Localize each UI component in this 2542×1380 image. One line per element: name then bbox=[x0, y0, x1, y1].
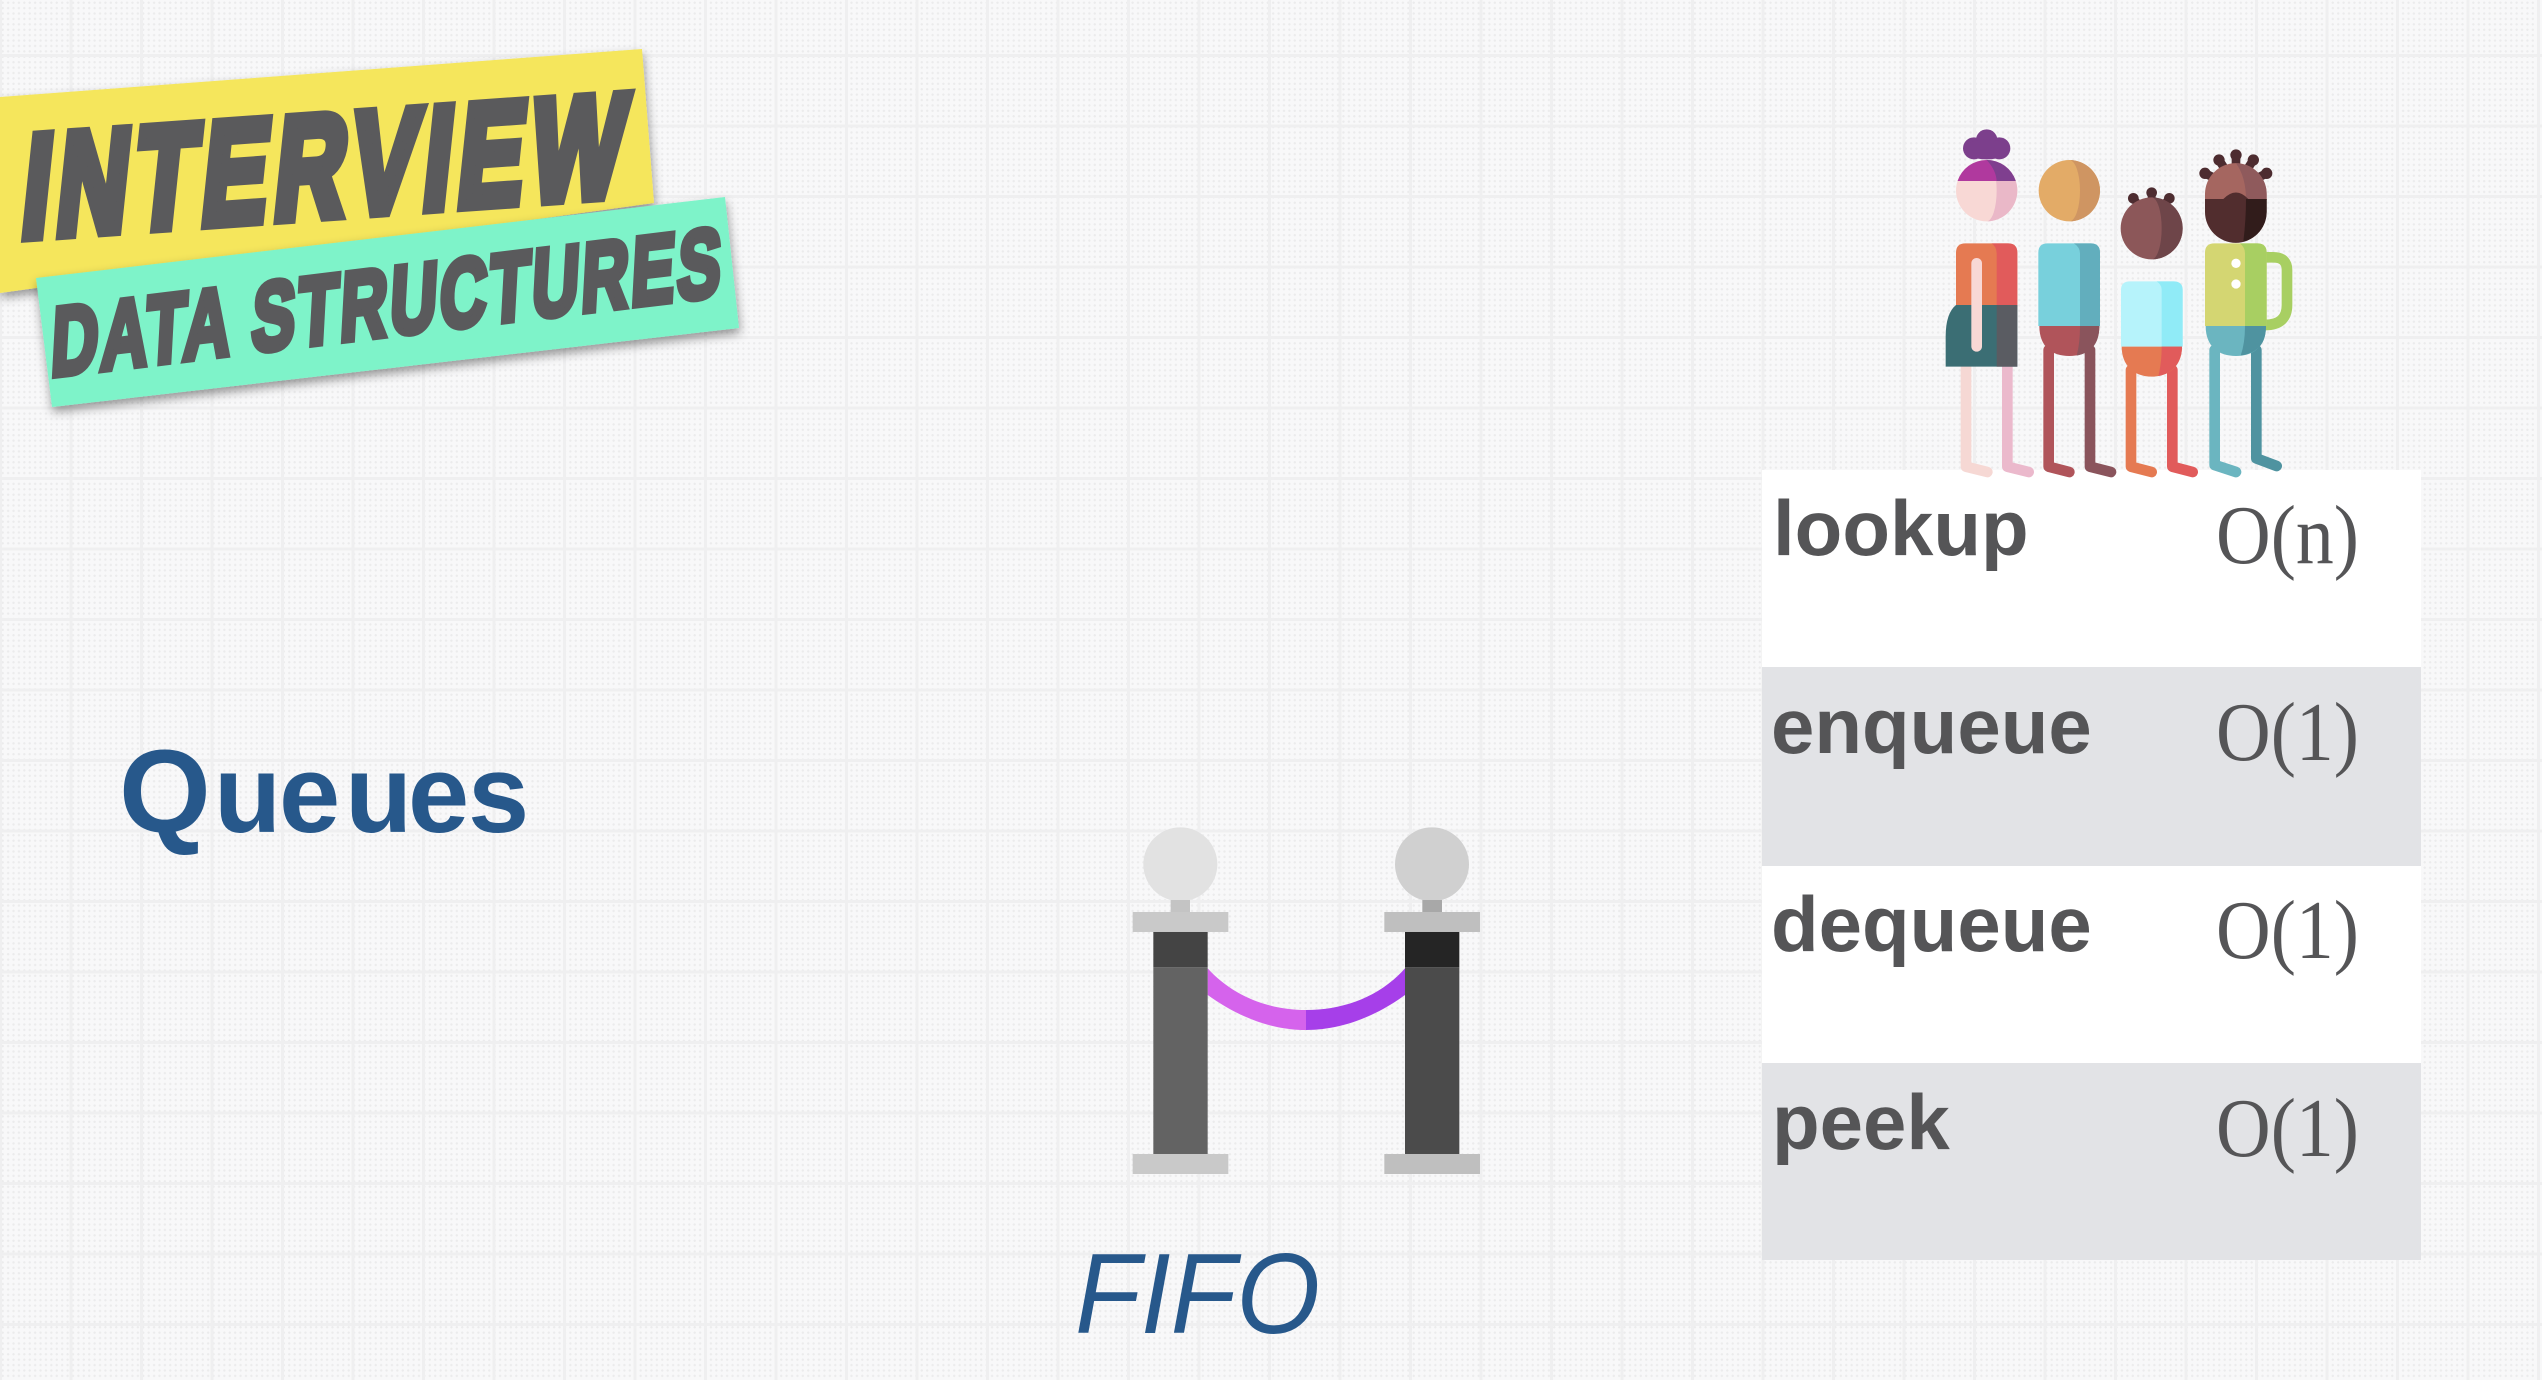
icon: stanchions with velvet rope bbox=[1133, 827, 1480, 1174]
banner: interview: INTERVIEW bbox=[16, 64, 641, 269]
row: peek bbox=[1762, 1063, 2421, 1260]
row: enqueue: O(1) bbox=[2216, 686, 2359, 779]
right post bbox=[1384, 827, 1480, 1174]
label: FIFO: FIFO bbox=[1075, 1231, 1320, 1358]
row: dequeue bbox=[1762, 866, 2421, 1064]
table: queue operations complexity bbox=[1762, 470, 2421, 1260]
row: peek: O(1) bbox=[2216, 1082, 2359, 1175]
heading: Queues: Q bbox=[119, 726, 211, 858]
banner: data structures: DATA STRUCTURES bbox=[49, 207, 727, 397]
rope bbox=[1208, 968, 1405, 1030]
row: dequeue: O(1) bbox=[2216, 884, 2359, 977]
person 3 bbox=[2121, 187, 2193, 472]
row: lookup bbox=[1762, 470, 2421, 668]
person 2 bbox=[2038, 160, 2111, 472]
person 1 bbox=[1946, 129, 2029, 472]
row: enqueue: enqueue bbox=[1771, 682, 2092, 770]
row: dequeue: dequeue bbox=[1771, 880, 2092, 968]
row: enqueue bbox=[1762, 667, 2421, 867]
left post bbox=[1133, 827, 1228, 1174]
row: peek: peek bbox=[1772, 1078, 1950, 1166]
person 4 bbox=[2199, 149, 2287, 472]
heading: Queues: ueues bbox=[214, 733, 529, 856]
title banner bbox=[0, 49, 739, 407]
row: lookup: lookup bbox=[1773, 484, 2029, 572]
row: lookup: O(n) bbox=[2216, 489, 2359, 582]
icon: people in a queue bbox=[1946, 129, 2287, 472]
